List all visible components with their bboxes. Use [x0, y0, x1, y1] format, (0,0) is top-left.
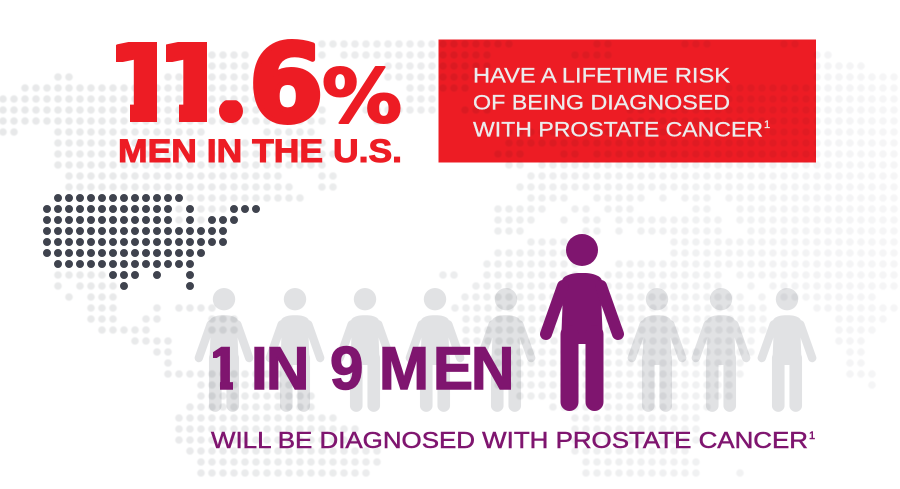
grey figure 1	[199, 288, 249, 406]
highlighted purple figure	[546, 234, 618, 402]
text block: lifetime risk statement: 1	[764, 119, 770, 131]
text block: lifetime risk statement: OF BEING DIAGNOSED	[473, 90, 730, 114]
text block: will be diagnosed statement: 1	[809, 430, 815, 442]
grey figure 4	[410, 288, 460, 406]
grey figure 2	[270, 288, 320, 406]
grey figure 8	[696, 288, 746, 406]
grey figure 3	[340, 288, 390, 406]
grey figure 7	[632, 288, 682, 406]
text block: lifetime risk statement: WITH PROSTATE CANCER	[473, 118, 763, 142]
text block: lifetime risk statement	[473, 64, 770, 142]
text block: will be diagnosed statement: WILL BE DIAGNOSED WITH PROSTATE CANCER	[211, 427, 808, 453]
subheading: men in the U.S.: MEN IN THE U.S.	[118, 133, 402, 169]
row of grey men with one highlighted	[199, 234, 812, 406]
heading: 1 in 9 men: 1 IN 9 MEN	[207, 335, 514, 402]
text block: lifetime risk statement: HAVE A LIFETIME RISK	[473, 64, 731, 88]
grey figure 9	[762, 288, 812, 406]
heading: 11.6%: %	[322, 54, 402, 140]
grey figure 5	[481, 288, 531, 406]
panel: red lifetime risk box	[438, 40, 816, 162]
map of the United States in dark dots	[47, 198, 257, 286]
heading: 11.6%: 11.6	[106, 23, 323, 149]
